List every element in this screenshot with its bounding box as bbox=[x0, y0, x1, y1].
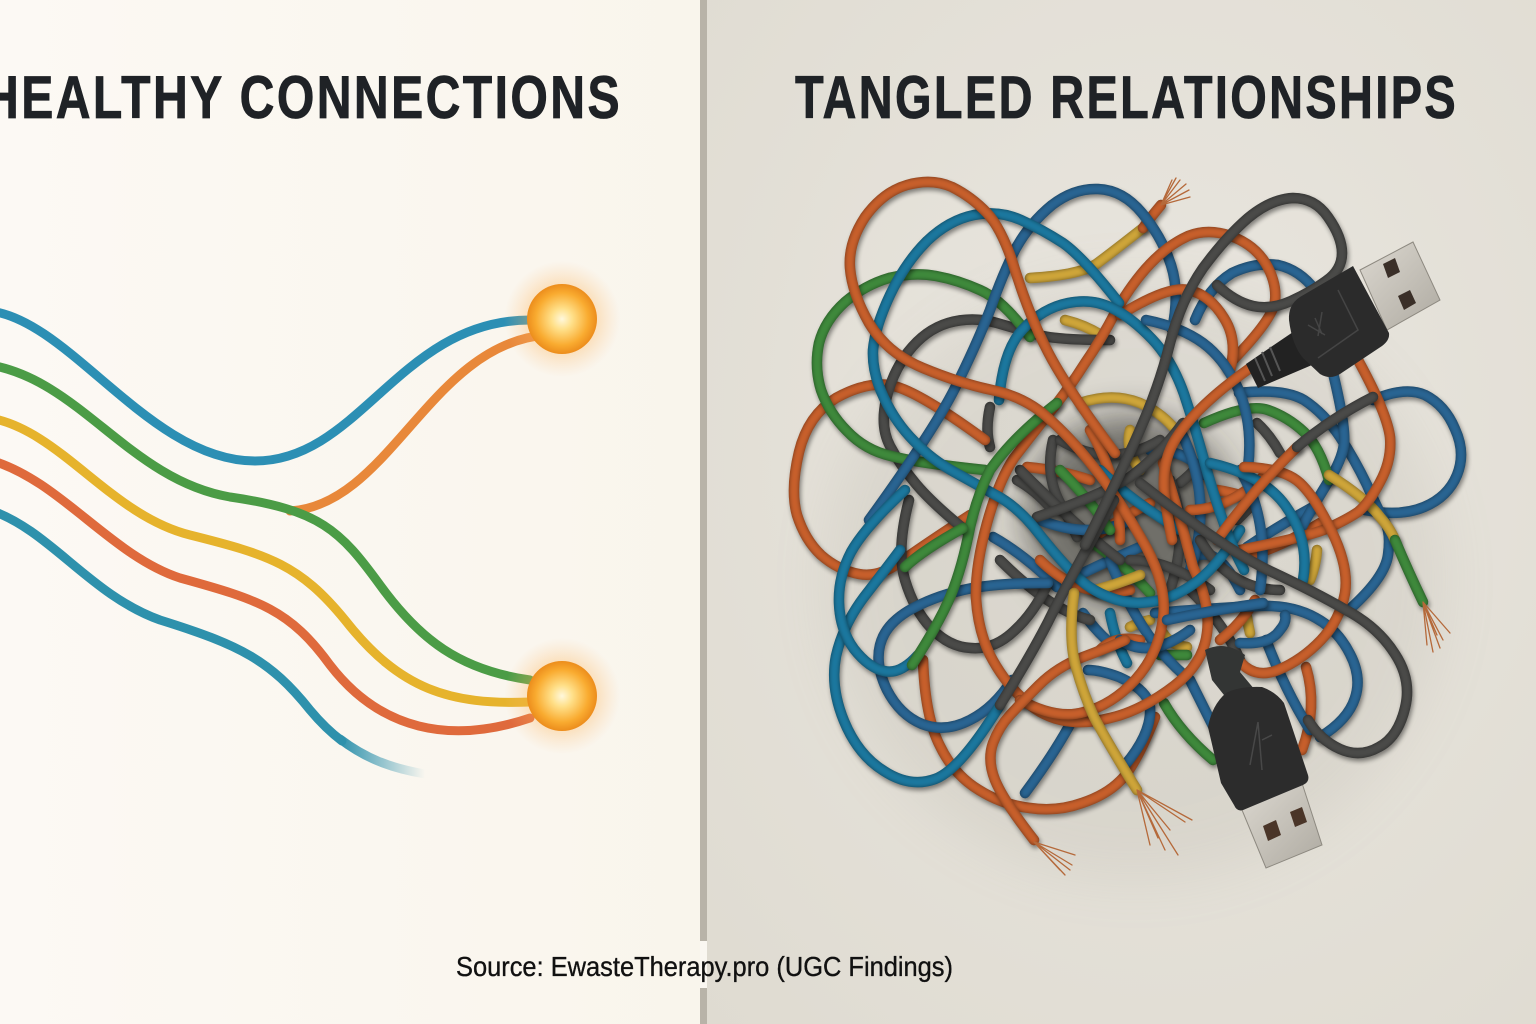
wire: dark blue top right bbox=[1195, 264, 1315, 320]
wire: green bbox=[0, 365, 530, 680]
wire: orange bottom loop bbox=[923, 660, 1155, 809]
wire: dark blue central bbox=[1146, 320, 1249, 467]
frayed copper strands: bottom centre bbox=[1137, 790, 1192, 855]
wire: yellow frayed top bbox=[1030, 228, 1143, 278]
wire: red bbox=[0, 460, 530, 731]
wire: green large loop bbox=[817, 274, 1030, 470]
frayed copper strands: right bbox=[1423, 602, 1450, 652]
wire: yellow bbox=[0, 418, 530, 702]
wire: gray strand to right bbox=[1297, 397, 1373, 447]
wire: teal low loop bbox=[834, 550, 1000, 782]
wire: blue right lower bbox=[1266, 640, 1310, 730]
wire: gray top loop to plug bbox=[1085, 198, 1342, 545]
wire: dark blue lower right loop bbox=[1155, 606, 1358, 737]
wire: teal fading bbox=[0, 510, 342, 741]
wire: green to loop bbox=[912, 403, 1057, 665]
wire: teal left big loop bbox=[873, 213, 1240, 603]
icon: usb plug top right bbox=[1246, 242, 1440, 388]
wire: orange frayed lower bbox=[990, 640, 1125, 840]
wire: right orange arcs bbox=[1302, 667, 1311, 750]
source caption: Source: EwasteTherapy.pro (UGC Findings) bbox=[456, 951, 953, 982]
wire: dark blue top arc bbox=[869, 189, 1176, 520]
frayed copper strands: bottom left bbox=[1034, 842, 1075, 875]
wire: orange strand to right bbox=[1217, 447, 1297, 540]
wire: dark blue left lower loop bbox=[879, 583, 1048, 728]
frayed copper strands: top bbox=[1161, 178, 1190, 205]
wire: gray long diagonal bbox=[1140, 483, 1407, 753]
dark gaps in knot core bbox=[1025, 415, 1235, 615]
divider gap behind source bbox=[700, 941, 707, 988]
wire: green short bbox=[905, 528, 963, 567]
wire: teal small loop bbox=[839, 490, 918, 672]
wire: orange main looped strand bbox=[850, 182, 1164, 714]
wire: gray core diagonal bbox=[1037, 423, 1183, 517]
wire: dark blue arc right bbox=[1239, 392, 1389, 608]
wire: dark blue right arc bbox=[1210, 463, 1305, 580]
wire: orange under plug bbox=[1164, 368, 1250, 540]
wire: gray left arc bbox=[884, 320, 1110, 530]
shadow of tangle bbox=[825, 280, 1445, 880]
wire: orange left loop bbox=[794, 385, 985, 575]
wire: dark blue hook bbox=[1240, 615, 1285, 643]
wire: yellow to green end bbox=[1329, 475, 1395, 540]
wire: orange right inner bbox=[1237, 467, 1346, 673]
wire: orange long arch bbox=[976, 232, 1275, 722]
chart: healthy parallel wires bbox=[0, 311, 545, 774]
wire: dark blue long core bbox=[1167, 603, 1263, 620]
icon: glowing top node bbox=[504, 261, 620, 377]
wire: dark blue bottom right strand bbox=[1088, 670, 1150, 765]
wire: dark blue right loop bbox=[1365, 391, 1461, 513]
icon: glowing bottom node bbox=[504, 638, 620, 754]
wire: yellow frayed bottom bbox=[1071, 593, 1137, 790]
illustration: tangled cables bbox=[794, 182, 1461, 840]
wire: orange frayed top bbox=[1143, 205, 1161, 228]
wire: orange right bbox=[1240, 360, 1390, 550]
wire: yellow core arc bbox=[1080, 398, 1173, 427]
wire: dark blue strand right bbox=[1300, 373, 1344, 530]
wire: green right bbox=[1204, 408, 1329, 480]
wire: orange branch bbox=[290, 335, 545, 511]
panel: tangled relationships background bbox=[707, 0, 1536, 1024]
heading: healthy connections: HEALTHY CONNECTIONS bbox=[0, 64, 622, 131]
wire: teal central arch bbox=[999, 301, 1244, 570]
wire: blue top bbox=[0, 311, 530, 461]
wire: orange inner arc bbox=[1120, 289, 1233, 370]
panel: healthy connections background bbox=[0, 0, 700, 1024]
icon: usb plug bottom bbox=[1205, 646, 1322, 868]
wire: green frayed end bbox=[1395, 540, 1423, 602]
wire: dark blue bottom strand bbox=[1025, 715, 1075, 793]
wire: green under plug bbox=[1164, 703, 1213, 760]
wire: gray lower loop bbox=[901, 500, 1048, 648]
wire: gray long down bbox=[1000, 500, 1114, 705]
filler wires at the knot core bbox=[988, 320, 1320, 730]
